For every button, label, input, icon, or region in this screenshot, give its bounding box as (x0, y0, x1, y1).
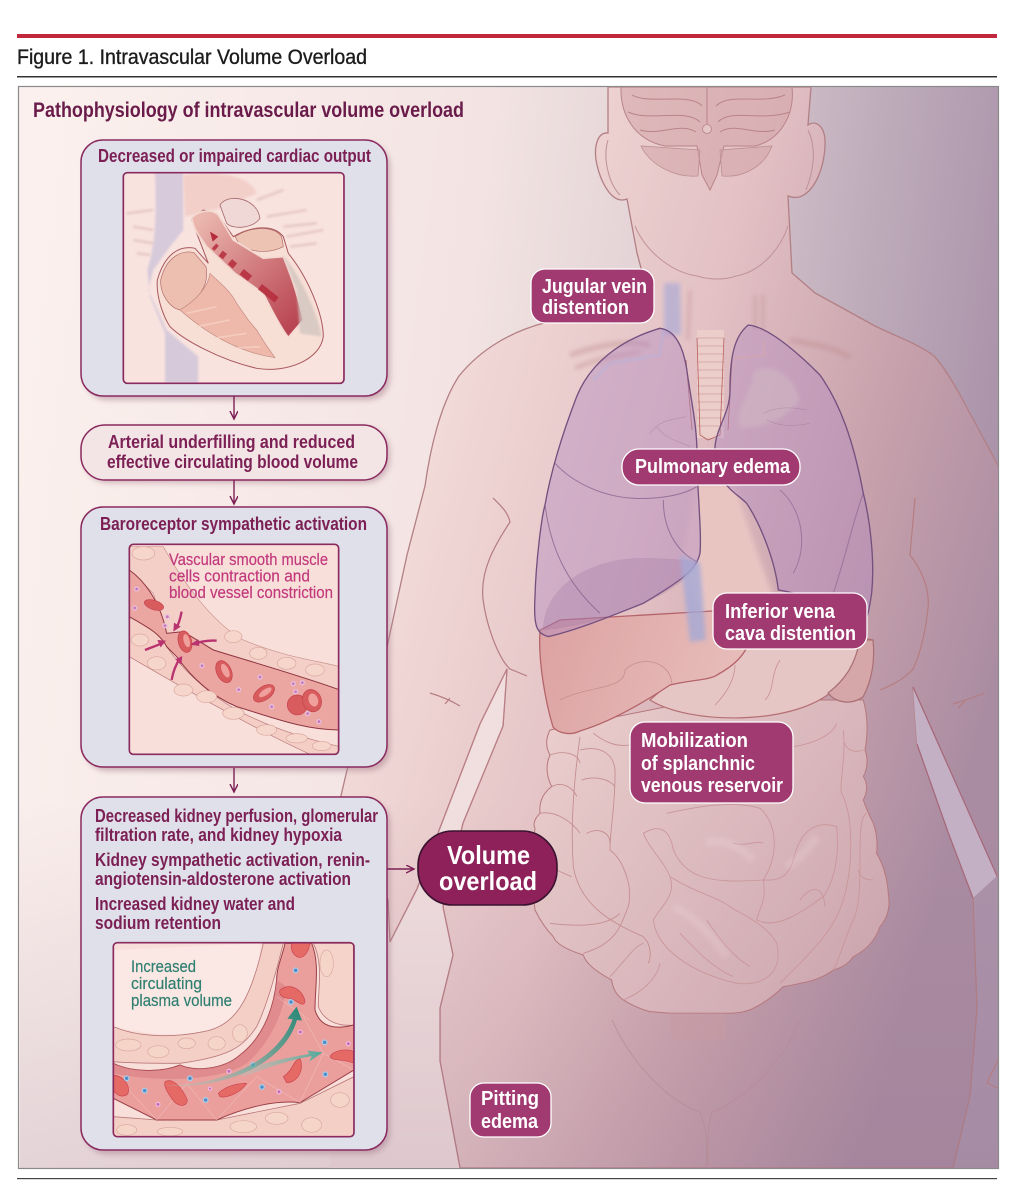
box text: Arterial underfilling and reduced (108, 432, 355, 452)
label: inferior vena cava distention: Inferior vena (725, 601, 836, 623)
heart wall (157, 210, 323, 369)
box text: Decreased kidney perfusion, glomerular (95, 806, 378, 826)
tissue top (113, 943, 283, 1063)
ears (606, 130, 813, 195)
neck muscles (570, 290, 850, 368)
volume overload callout: overload (439, 866, 537, 896)
left atrium (235, 229, 283, 251)
label: pulmonary edema: Pulmonary edema (635, 456, 791, 478)
box title: Decreased or impaired cardiac output (98, 146, 371, 166)
tissue bottom (113, 1077, 354, 1137)
volume overload callout (418, 831, 557, 905)
trachea (686, 330, 732, 440)
icon: vessel with increased plasma volume (113, 943, 354, 1137)
box text: Kidney sympathetic activation, renin- (95, 850, 370, 870)
label: pulmonary edema (622, 449, 800, 485)
red blood cells (113, 943, 354, 1105)
arrow (233, 480, 235, 504)
flow box: cardiac output (81, 140, 390, 400)
lungs (535, 325, 873, 637)
left ventricle outflow (192, 211, 303, 337)
label: mobilization of splanchnic venous reservoir: Mobilization (641, 730, 748, 752)
jugular vein (664, 283, 681, 335)
right lung (535, 328, 700, 637)
box text: sodium retention (95, 913, 221, 933)
red blood cells (143, 597, 325, 715)
liver (540, 610, 750, 734)
left lung (715, 325, 873, 624)
figure title: Figure 1. Intravascular Volume Overload (17, 46, 367, 69)
box text: angiotensin-aldosterone activation (95, 869, 351, 889)
body contour lines (430, 498, 998, 1088)
constriction arrows (145, 612, 217, 680)
vena cava (680, 555, 706, 642)
flow box: baroreceptor activation (81, 507, 390, 771)
right atrium (161, 252, 207, 310)
box text: Increased kidney water and (95, 894, 295, 914)
vessel caption (169, 550, 333, 602)
plasma caption (131, 957, 232, 1010)
dashed flow arrow (214, 246, 277, 300)
label: pitting edema: edema (481, 1111, 539, 1133)
flow box: kidney effects (81, 797, 390, 1154)
vessel caption: cells contraction and (169, 566, 310, 586)
blue plasma dots (124, 968, 328, 1102)
chest inner (698, 486, 774, 611)
plasma caption: Increased (131, 957, 196, 976)
box text: filtration rate, and kidney hypoxia (95, 825, 343, 845)
icon: heart cross-section (123, 173, 344, 383)
box text (95, 806, 378, 933)
vessel lumen (113, 943, 354, 1120)
flow box: arterial underfilling: effective circulating blood volume (107, 452, 358, 472)
label: jugular vein distention (531, 269, 654, 323)
flow box: arterial underfilling (81, 425, 390, 483)
jaw and chin (635, 226, 788, 279)
plasma caption: circulating (131, 974, 202, 993)
vessel caption: Vascular smooth muscle (169, 550, 328, 569)
arrow (387, 868, 414, 870)
pelvis lines (612, 1020, 800, 1168)
vessel caption: blood vessel constriction (169, 583, 333, 602)
label: jugular vein distention: distention (542, 297, 629, 319)
panel heading: Pathophysiology of intravascular volume overload (33, 99, 464, 122)
volume overload callout: Volume (447, 840, 530, 870)
body silhouette (340, 87, 1000, 1168)
intestines (534, 700, 889, 1040)
vessel lumen (129, 570, 340, 730)
spleen (828, 640, 874, 702)
label: inferior vena cava distention: cava distention (725, 623, 856, 645)
stomach (650, 630, 873, 718)
box title: Baroreceptor sympathetic activation (100, 514, 367, 534)
teal arrows (237, 1051, 323, 1077)
label: inferior vena cava distention (713, 593, 867, 649)
plasma caption: plasma volume (131, 991, 232, 1010)
icon: constricted blood vessel (129, 544, 340, 754)
right ventricle (180, 273, 275, 358)
label: mobilization of splanchnic venous reservoir (630, 722, 793, 803)
top red rule (17, 34, 997, 38)
label: pitting edema: Pitting (481, 1088, 539, 1110)
label: mobilization of splanchnic venous reservoir: venous reservoir (641, 775, 783, 797)
brain (621, 87, 792, 190)
label: mobilization of splanchnic venous reservoir: of splanchnic (641, 753, 755, 775)
label: pitting edema (470, 1083, 551, 1137)
pink plasma dots (156, 1030, 350, 1106)
label: jugular vein distention: Jugular vein (542, 276, 647, 298)
plasma dots (133, 587, 321, 724)
arrow (233, 396, 235, 419)
arrow (233, 768, 235, 792)
